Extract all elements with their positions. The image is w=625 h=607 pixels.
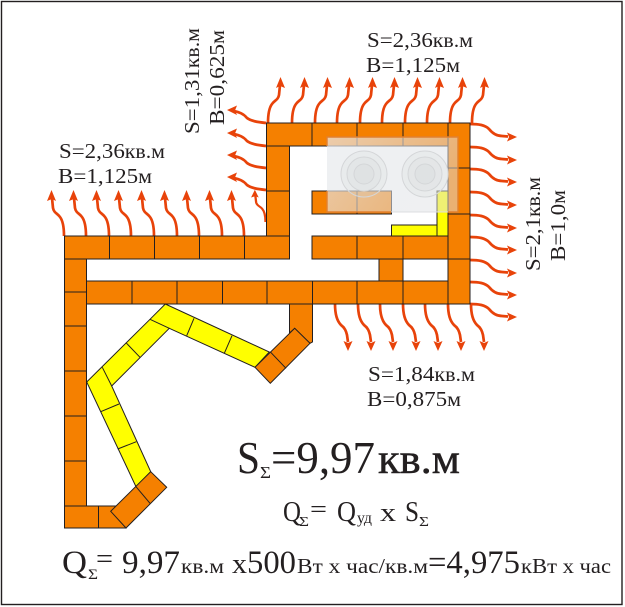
arrows: heat from left upper wall bbox=[227, 106, 266, 190]
label bottom wall: S=1,84 кв.м bbox=[368, 362, 475, 386]
heat formula: Q bbox=[337, 497, 356, 528]
heat calculation result: = bbox=[96, 544, 113, 575]
upper brick masonry bbox=[266, 123, 470, 304]
heat calculation result: х bbox=[232, 549, 247, 580]
angled orange bricks lower bbox=[111, 472, 167, 528]
burner right bbox=[402, 151, 448, 197]
label upper-left wall bbox=[58, 139, 165, 188]
arrows: heat from right wall bbox=[470, 124, 517, 322]
cooktop overlay panel with burners bbox=[327, 137, 458, 212]
label bottom wall bbox=[367, 362, 475, 411]
yellow firebrick flue bbox=[87, 304, 269, 487]
heat formula: Σ bbox=[299, 515, 309, 530]
arrows: heat from top wall bbox=[268, 77, 489, 123]
heat formula: = bbox=[310, 497, 327, 523]
heat formula: х bbox=[380, 498, 396, 527]
label left upper wall, rotated bbox=[180, 28, 229, 134]
heat calculation result: 500 bbox=[247, 545, 296, 581]
lower brick row bbox=[86, 281, 448, 304]
label top wall: В=1,125 м bbox=[366, 53, 460, 77]
label left upper wall, rotated: В=0,625м bbox=[205, 30, 229, 125]
heat formula bbox=[283, 497, 429, 530]
heat calculation result: кв.м bbox=[181, 554, 224, 578]
total area heading: кв.м bbox=[378, 437, 460, 483]
label top wall: S=2,36 кв.м bbox=[367, 28, 473, 52]
total area heading: =9,97 bbox=[271, 433, 375, 483]
heat formula: Σ bbox=[419, 515, 429, 530]
left brick column bbox=[64, 259, 126, 528]
yellow firebrick chimney liner in firebox bbox=[392, 191, 448, 236]
heat calculation result: Вт х час/кв.м bbox=[297, 554, 428, 578]
heat formula: уд bbox=[357, 510, 372, 527]
burner left bbox=[341, 151, 387, 197]
label upper-left wall: В=1,125 м bbox=[58, 164, 152, 188]
total area heading: S bbox=[237, 433, 260, 483]
heat formula: S bbox=[405, 497, 419, 528]
middle brick row bbox=[64, 236, 448, 281]
heat calculation result: Q bbox=[62, 545, 87, 581]
angled orange bricks upper bbox=[255, 304, 312, 383]
total area heading: Σ bbox=[260, 463, 271, 482]
heat calculation result: 9,97 bbox=[122, 545, 180, 581]
heat calculation result: кВт х час bbox=[521, 554, 611, 578]
heat calculation result: =4,975 bbox=[428, 545, 520, 581]
label right wall, rotated bbox=[521, 177, 570, 271]
label top wall bbox=[366, 28, 473, 77]
label upper-left wall: S=2,36 кв.м bbox=[59, 139, 165, 163]
total area heading bbox=[237, 433, 460, 483]
heat calculation result bbox=[62, 544, 611, 583]
label left upper wall, rotated: S=1,31кв.м bbox=[180, 28, 204, 134]
heat formula: Q bbox=[283, 497, 301, 528]
arrows: heat from bottom wall bbox=[335, 304, 488, 351]
label right wall, rotated: В=1,0м bbox=[546, 190, 570, 261]
label right wall, rotated: S=2,1кв.м bbox=[521, 177, 545, 271]
arrows: heat from long upper-left wall bbox=[47, 190, 266, 236]
label bottom wall: В=0,875 м bbox=[367, 387, 461, 411]
heat calculation result: Σ bbox=[88, 567, 98, 583]
